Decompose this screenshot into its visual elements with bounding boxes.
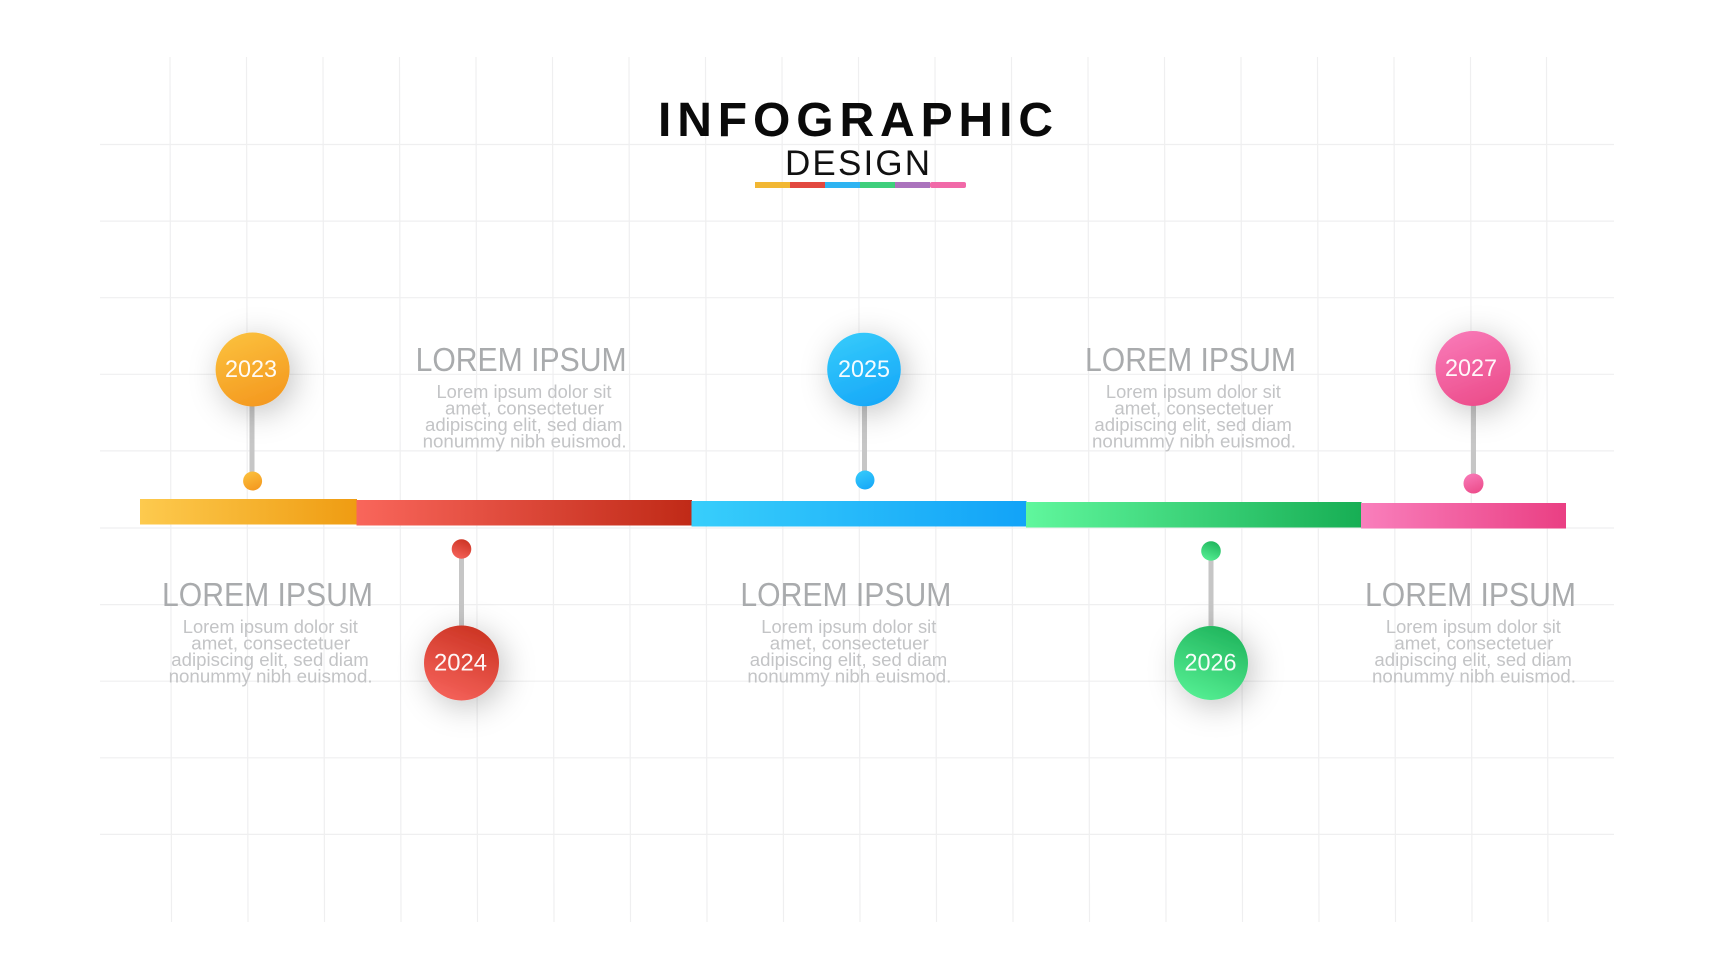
text block: top fourth: nonummy nibh euismod.	[1092, 430, 1296, 452]
text block: top fourth: amet, consectetuer	[1114, 398, 1273, 418]
text block: top fourth	[1085, 341, 1296, 452]
text block: bottom center: amet, consectetuer	[770, 632, 929, 654]
marker: 2026: 2026	[1184, 650, 1236, 676]
text block: bottom right: nonummy nibh euismod.	[1372, 666, 1576, 686]
text block: bottom center: Lorem ipsum dolor sit	[761, 616, 936, 637]
segment: blue	[692, 501, 1026, 526]
heading: INFOGRAPHIC: INFOGRAPHIC	[658, 94, 1053, 147]
marker: 2023: 2023	[225, 356, 277, 383]
text block: bottom right	[1365, 576, 1576, 686]
text block: top fourth: LOREM IPSUM	[1085, 341, 1296, 378]
text block: top second: amet, consectetuer	[445, 398, 604, 418]
text block: top second	[416, 341, 627, 452]
text block: top fourth: adipiscing elit, sed diam	[1094, 414, 1292, 435]
text block: bottom center: adipiscing elit, sed diam	[750, 649, 947, 670]
text block: top second: nonummy nibh euismod.	[423, 430, 627, 452]
marker: 2026	[1174, 541, 1248, 700]
text block: bottom center: LOREM IPSUM	[740, 576, 951, 613]
text block: bottom right: amet, consectetuer	[1394, 632, 1553, 654]
text block: bottom right: LOREM IPSUM	[1365, 576, 1576, 613]
background grid	[100, 57, 1614, 922]
marker: 2023	[216, 332, 290, 490]
text block: bottom center	[740, 576, 951, 686]
text block: bottom left: Lorem ipsum dolor sit	[183, 616, 358, 637]
text block: top second: Lorem ipsum dolor sit	[436, 381, 612, 402]
text block: top second: LOREM IPSUM	[416, 341, 627, 378]
text block: bottom right: adipiscing elit, sed diam	[1374, 649, 1572, 670]
text block: bottom left: adipiscing elit, sed diam	[171, 649, 369, 670]
marker: 2024	[424, 539, 499, 700]
text block: bottom right: Lorem ipsum dolor sit	[1386, 616, 1561, 637]
text block: bottom left: LOREM IPSUM	[162, 576, 373, 613]
text block: bottom left: amet, consectetuer	[191, 632, 350, 654]
segment: green	[1026, 502, 1362, 528]
segment: pink	[1361, 503, 1566, 528]
text block: bottom center: nonummy nibh euismod.	[747, 666, 951, 686]
timeline bar	[140, 499, 1566, 528]
text block: top fourth: Lorem ipsum dolor sit	[1106, 381, 1281, 402]
segment: yellow	[140, 499, 357, 524]
segment: red	[356, 500, 692, 526]
text block: top second: adipiscing elit, sed diam	[425, 414, 622, 435]
title	[658, 94, 1053, 188]
text block: bottom left	[162, 576, 373, 686]
marker: 2024: 2024	[434, 650, 487, 676]
marker: 2027: 2027	[1445, 355, 1497, 382]
marker: 2025	[827, 333, 901, 490]
subheading: DESIGN: DESIGN	[785, 144, 930, 183]
marker: 2025: 2025	[838, 356, 890, 383]
marker: 2027	[1436, 331, 1510, 494]
text block: bottom left: nonummy nibh euismod.	[169, 666, 373, 686]
title underline	[755, 182, 966, 188]
